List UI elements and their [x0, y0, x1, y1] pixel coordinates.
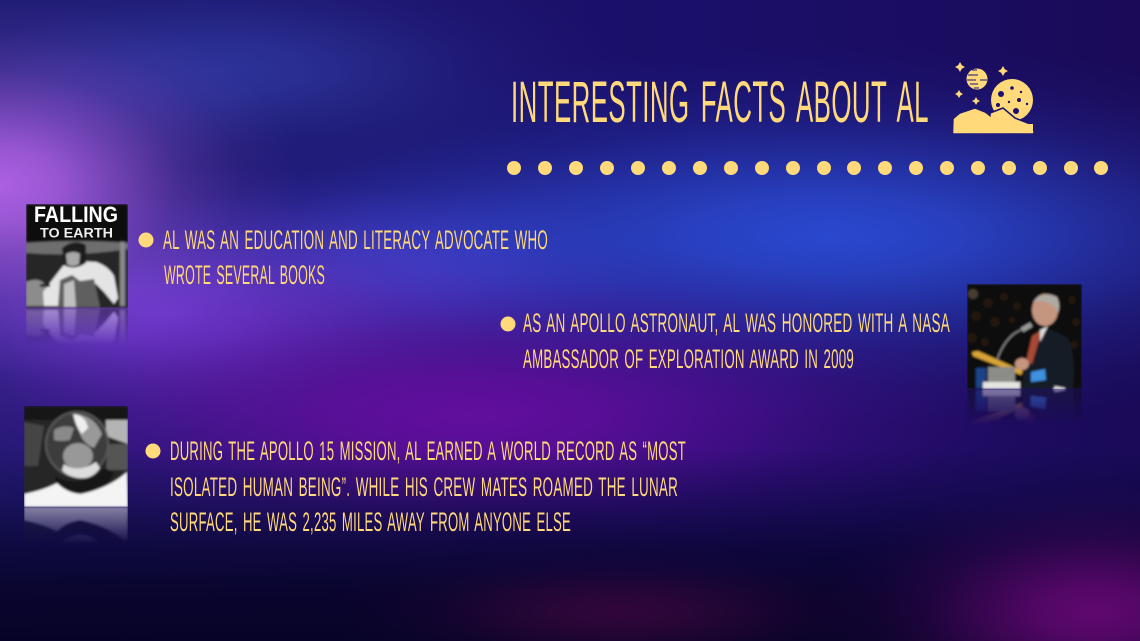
photo: Al at podium — [967, 284, 1082, 390]
fact 1: WROTE SEVERAL BOOKS — [164, 260, 325, 290]
fact 2 — [500, 308, 950, 374]
photo: astronaut in helmet — [24, 406, 128, 507]
fact 3 — [146, 436, 686, 537]
fact 3: SURFACE, HE WAS 2,235 MILES AWAY FROM ANYONE ELSE — [170, 507, 571, 537]
reflection: podium — [967, 389, 1082, 422]
reflection: astronaut — [24, 507, 128, 540]
icon: moon, planet and stars — [954, 62, 1033, 133]
reflection: book cover — [26, 308, 128, 342]
dotted divider — [507, 161, 1108, 175]
photo: Falling to Earth book cover: TO EARTH — [40, 224, 113, 240]
fact 1 — [138, 225, 548, 290]
photo: Falling to Earth book cover — [26, 202, 128, 308]
photo: Falling to Earth book cover: FALLING — [34, 202, 118, 227]
text: AL WAS AN EDUCATION AND LITERACY ADVOCATE WHO — [163, 225, 548, 255]
